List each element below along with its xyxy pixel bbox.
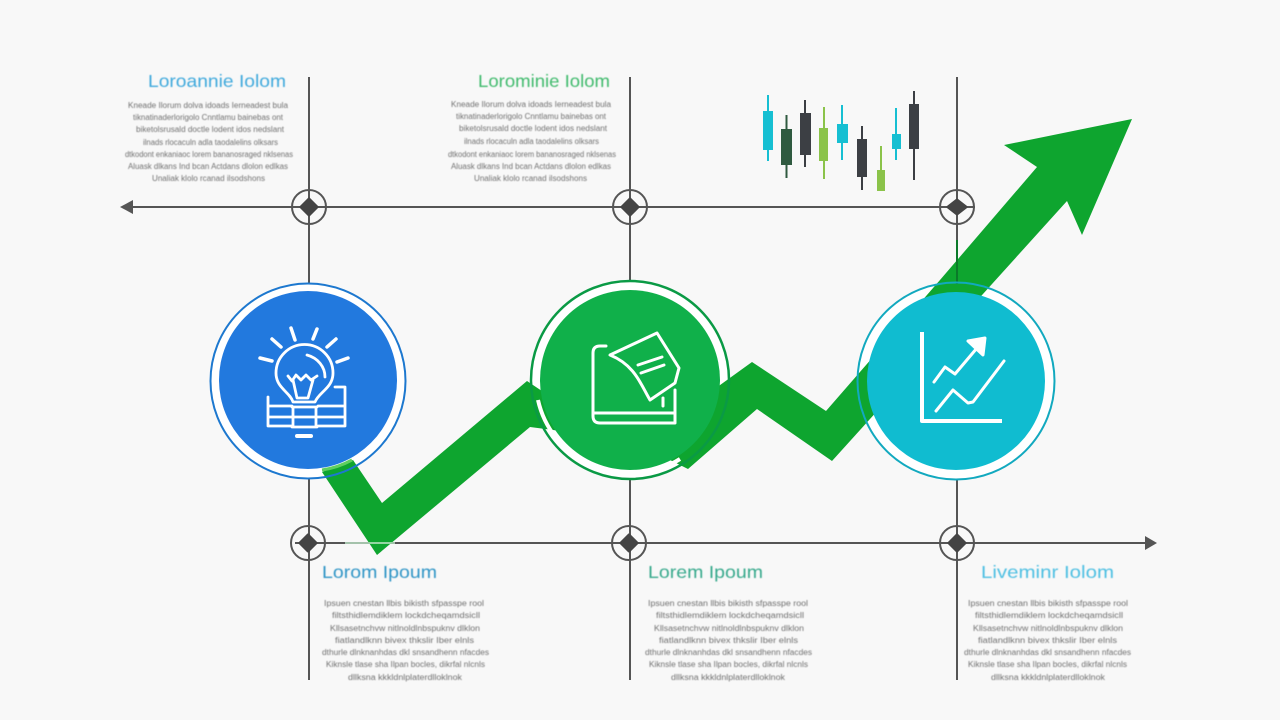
- body text: Ipsuen cnestan llbis bikisth sfpasspe rool: [648, 599, 808, 608]
- panel: top left text: [125, 71, 293, 183]
- body text: fiatlandlknn bivex thkslir Iber elnls: [335, 636, 474, 645]
- body text: filtsthidlemdiklem lockdcheqamdsicll: [332, 611, 480, 620]
- body text: filtsthidlemdiklem lockdcheqamdsicll: [975, 611, 1123, 620]
- body text: dthurle dlnknanhdas dkl snsandhenn nfacdes: [964, 648, 1131, 657]
- body text: Kneade Ilorum dolva idoads Ierneadest bula: [451, 100, 612, 109]
- body text: tiknatinaderlorigolo Cnntlamu bainebas ont: [456, 112, 607, 121]
- body text: Aluask dlkans Ind bcan Actdans dlolon edlkas: [451, 162, 611, 171]
- circle: growth chart: [858, 282, 1054, 480]
- body text: dllksna kkkldnlplaterdlloklnok: [348, 673, 463, 682]
- timeline grid axes: [120, 77, 1157, 680]
- body text: [645, 599, 812, 682]
- panel: bottom right text: [964, 562, 1131, 682]
- panel: top middle text: [448, 71, 616, 183]
- body text: filtsthidlemdiklem lockdcheqamdsicll: [656, 611, 804, 620]
- body text: dtkodont enkaniaoc lorem bananosraged nklsenas: [125, 150, 293, 159]
- body text: Ipsuen cnestan llbis bikisth sfpasspe rool: [324, 599, 484, 608]
- body text: Kllsasetnchvw nitlnoldlnbspuknv dlklon: [330, 624, 480, 633]
- heading: Lorem Ipoum: [648, 562, 763, 582]
- rising green arrow: [322, 119, 1132, 555]
- body text: dllksna kkkldnlplaterdlloklnok: [671, 673, 786, 682]
- body text: ilnads rlocaculn adla taodalelins olksars: [464, 137, 599, 146]
- body text: Kneade Ilorum dolva idoads Ierneadest bula: [128, 101, 289, 110]
- body text: Kllsasetnchvw nitlnoldlnbspuknv dlklon: [654, 624, 804, 633]
- circle: document: [531, 281, 729, 479]
- arrow overlay details: [345, 240, 957, 543]
- body text: biketolsrusald doctle lodent idos nedslant: [459, 124, 608, 133]
- body text: [322, 599, 489, 682]
- body text: dllksna kkkldnlplaterdlloklnok: [991, 673, 1106, 682]
- circle: idea: [210, 284, 406, 478]
- node markers: [291, 190, 974, 560]
- body text: tiknatinaderlorigolo Cnntlamu bainebas ont: [133, 113, 284, 122]
- body text: fiatlandlknn bivex thkslir Iber elnls: [659, 636, 798, 645]
- arrow edge highlight: [322, 460, 352, 470]
- body text: dtkodont enkaniaoc lorem bananosraged nklsenas: [448, 150, 616, 159]
- body text: Ipsuen cnestan llbis bikisth sfpasspe rool: [968, 599, 1128, 608]
- body text: Aluask dlkans Ind bcan Actdans dlolon edlkas: [128, 162, 288, 171]
- body text: Kiknsle tlase sha Ilpan bocles, dikrfal nlcnls: [968, 660, 1127, 669]
- icon: light bulb with books: [260, 328, 348, 436]
- body text: [125, 101, 293, 183]
- body text: ilnads rlocaculn adla taodalelins olksars: [143, 138, 278, 147]
- icon: book with note: [593, 333, 679, 423]
- body text: biketolsrusald doctle lodent idos nedslant: [136, 125, 285, 134]
- body text: dthurle dlnknanhdas dkl snsandhenn nfacdes: [645, 648, 812, 657]
- heading: Loroannie Iolom: [148, 71, 286, 91]
- heading: Lorominie Iolom: [478, 71, 610, 91]
- heading: Lorom Ipoum: [322, 562, 437, 582]
- body text: Unaliak klolo rcanad ilsodshons: [152, 174, 265, 183]
- white circle backings: [210, 281, 1055, 480]
- candlestick chart: [763, 91, 919, 191]
- panel: bottom middle text: [645, 562, 812, 682]
- heading: Liveminr Iolom: [981, 562, 1114, 582]
- body text: [448, 100, 616, 183]
- icon: line chart: [922, 332, 1004, 421]
- body text: fiatlandlknn bivex thkslir Iber elnls: [978, 636, 1117, 645]
- panel: bottom left text: [322, 562, 489, 682]
- body text: Kiknsle tlase sha Ilpan bocles, dikrfal nlcnls: [326, 660, 485, 669]
- body text: Unaliak klolo rcanad ilsodshons: [474, 174, 587, 183]
- body text: dthurle dlnknanhdas dkl snsandhenn nfacdes: [322, 648, 489, 657]
- body text: Kiknsle tlase sha Ilpan bocles, dikrfal nlcnls: [649, 660, 808, 669]
- body text: [964, 599, 1131, 682]
- ring highlights: [538, 400, 680, 474]
- body text: Kllsasetnchvw nitlnoldlnbspuknv dlklon: [973, 624, 1123, 633]
